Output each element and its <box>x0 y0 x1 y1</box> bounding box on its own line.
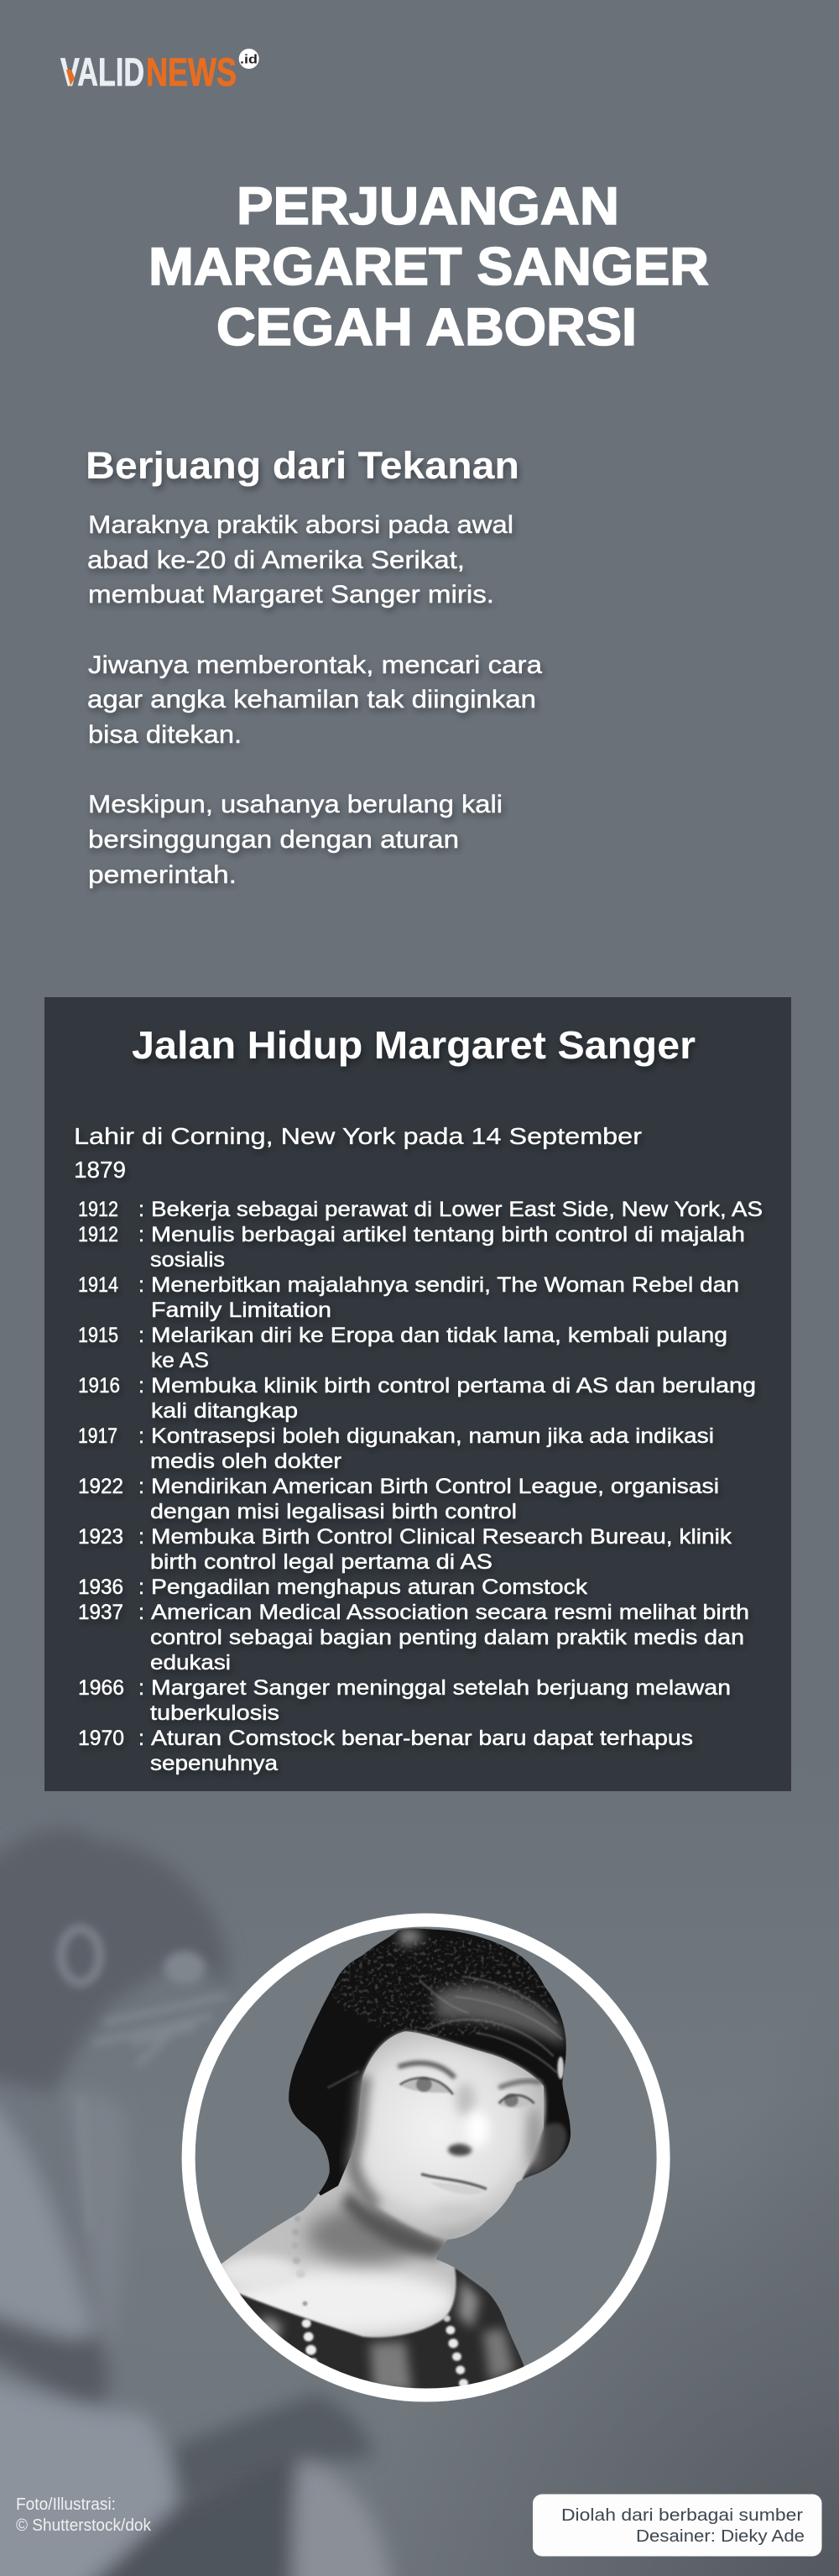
intro text paragraphs <box>87 511 543 889</box>
photo credit <box>16 2495 152 2535</box>
intro text paragraphs: membuat Margaret Sanger miris. <box>88 581 494 609</box>
1922 league: Mendirikan American Birth Control League, organisasi <box>151 1475 719 1498</box>
source and designer box: Diolah dari berbagai sumber <box>561 2505 803 2525</box>
1937 AMA: edukasi <box>150 1651 231 1675</box>
1936 court: : <box>138 1575 144 1599</box>
1912 articles: 1912 <box>78 1223 118 1246</box>
intro text paragraphs: Meskipun, usahanya berulang kali <box>88 791 503 818</box>
1936 court: 1936 <box>78 1575 123 1599</box>
background photo: blurred woman covering her face <box>0 1828 393 2576</box>
1937 AMA: control sebagai bagian penting dalam praktik medis dan <box>150 1626 744 1649</box>
1970 repeal: 1970 <box>78 1727 124 1750</box>
1916 clinic: kali ditangkap <box>151 1399 298 1423</box>
source and designer box: Desainer: Dieky Ade <box>636 2526 805 2546</box>
1912 nurse: Bekerja sebagai perawat di Lower East Side, New York, AS <box>151 1198 763 1221</box>
1914 magazine: Menerbitkan majalahnya sendiri, The Woman Rebel dan <box>151 1273 739 1297</box>
section heading: Berjuang dari Tekanan: Berjuang dari Tekanan <box>86 444 519 487</box>
1917 contraception: Kontrasepsi boleh digunakan, namun jika ada indikasi <box>151 1424 714 1448</box>
birth statement: Lahir di Corning, New York pada 14 September <box>74 1123 642 1149</box>
1912 nurse: 1912 <box>78 1198 118 1221</box>
panel: Jalan Hidup Margaret Sanger timeline <box>44 997 791 1791</box>
1937 AMA: : <box>138 1601 144 1624</box>
source and designer box <box>533 2495 822 2557</box>
intro text paragraphs: bersinggungan dengan aturan <box>88 826 459 854</box>
intro text paragraphs: Maraknya praktik aborsi pada awal <box>88 511 513 539</box>
1915 Europe <box>78 1324 727 1372</box>
1937 AMA: 1937 <box>78 1601 123 1624</box>
title: PERJUANGAN <box>237 177 619 236</box>
1915 Europe: : <box>138 1324 144 1347</box>
1966 death: 1966 <box>78 1676 124 1700</box>
intro text paragraphs: pemerintah. <box>88 861 237 889</box>
birth statement <box>74 1123 642 1183</box>
intro text paragraphs: Jiwanya memberontak, mencari cara <box>88 651 543 679</box>
1916 clinic: 1916 <box>78 1374 120 1398</box>
1912 articles <box>78 1223 745 1272</box>
1914 magazine: 1914 <box>78 1273 118 1297</box>
1917 contraception: medis oleh dokter <box>150 1450 341 1473</box>
1923 bureau: 1923 <box>78 1525 123 1549</box>
photo credit: © Shutterstock/dok <box>16 2516 152 2535</box>
1912 articles: Menulis berbagai artikel tentang birth control di majalah <box>151 1223 745 1246</box>
intro text paragraphs: agar angka kehamilan tak diinginkan <box>87 686 536 713</box>
title: MARGARET SANGER <box>149 238 709 296</box>
1912 nurse: : <box>138 1198 144 1221</box>
1923 bureau: birth control legal pertama di AS <box>150 1550 492 1574</box>
1915 Europe: ke AS <box>151 1349 209 1372</box>
1922 league: dengan misi legalisasi birth control <box>150 1500 517 1523</box>
1917 contraception <box>78 1424 714 1473</box>
intro text paragraphs: bisa ditekan. <box>88 721 242 749</box>
panel heading: Jalan Hidup Margaret Sanger <box>132 1023 696 1067</box>
1970 repeal: sepenuhnya <box>150 1752 278 1775</box>
1936 court: Pengadilan menghapus aturan Comstock <box>151 1575 588 1599</box>
1966 death <box>78 1676 731 1725</box>
timeline list <box>78 1198 763 1775</box>
1914 magazine <box>78 1273 739 1322</box>
1966 death: : <box>138 1676 144 1700</box>
1970 repeal <box>78 1727 693 1775</box>
1912 articles: : <box>138 1223 144 1246</box>
1922 league <box>78 1475 719 1523</box>
1915 Europe: Melarikan diri ke Eropa dan tidak lama, kembali pulang <box>151 1324 727 1347</box>
1970 repeal: : <box>138 1727 144 1750</box>
1923 bureau: Membuka Birth Control Clinical Research Bureau, klinik <box>151 1525 732 1549</box>
1916 clinic: : <box>138 1374 144 1398</box>
1923 bureau: : <box>138 1525 144 1549</box>
1966 death: Margaret Sanger meninggal setelah berjuang melawan <box>151 1676 731 1700</box>
1937 AMA: American Medical Association secara resmi melihat birth <box>151 1601 749 1624</box>
1914 magazine: Family Limitation <box>151 1298 331 1322</box>
logo: Validnews.id: .id <box>240 52 258 67</box>
1966 death: tuberkulosis <box>150 1701 279 1725</box>
1922 league: 1922 <box>78 1475 123 1498</box>
1916 clinic: Membuka klinik birth control pertama di AS dan berulang <box>151 1374 756 1398</box>
1914 magazine: : <box>138 1273 144 1297</box>
intro text paragraphs: abad ke-20 di Amerika Serikat, <box>87 546 465 574</box>
1915 Europe: 1915 <box>78 1324 118 1347</box>
1937 AMA <box>78 1601 749 1675</box>
logo: Validnews.id: VALID <box>60 50 144 94</box>
1970 repeal: Aturan Comstock benar-benar baru dapat terhapus <box>151 1727 693 1750</box>
1917 contraception: : <box>138 1424 144 1448</box>
title <box>149 177 709 357</box>
logo: Validnews.id: NEWS <box>146 50 237 94</box>
1916 clinic <box>78 1374 756 1423</box>
birth statement: 1879 <box>74 1157 126 1183</box>
portrait of Margaret Sanger in white ring <box>186 1914 664 2411</box>
1912 articles: sosialis <box>150 1248 225 1272</box>
1917 contraception: 1917 <box>78 1424 117 1448</box>
logo: Validnews.id <box>60 49 259 94</box>
photo credit: Foto/Illustrasi: <box>16 2495 116 2514</box>
1923 bureau <box>78 1525 732 1574</box>
1922 league: : <box>138 1475 144 1498</box>
title: CEGAH ABORSI <box>216 298 637 357</box>
